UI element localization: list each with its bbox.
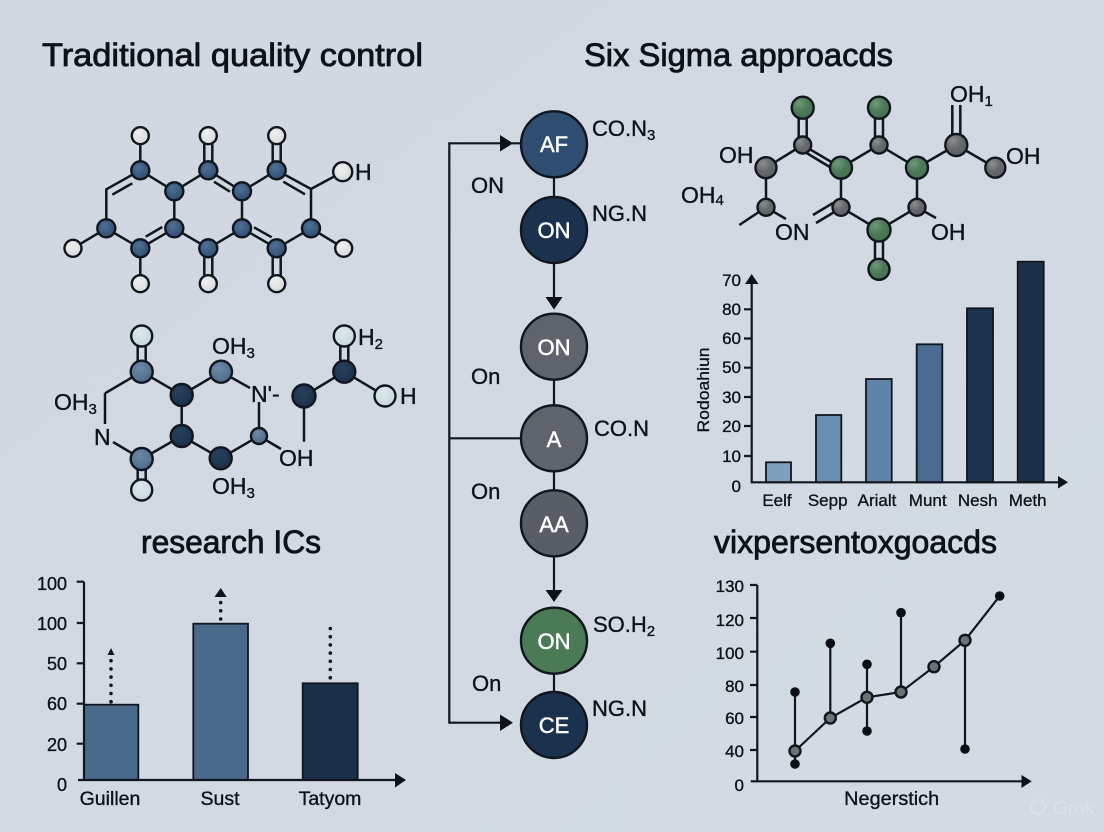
y tick labels: 80 xyxy=(725,677,744,696)
flowchart: central process xyxy=(449,111,655,758)
y tick labels xyxy=(37,574,67,795)
watermark: Grok: Grok xyxy=(1053,798,1095,819)
heading: vixpersentoxgoacds: vixpersentoxgoacds xyxy=(714,524,997,560)
bars xyxy=(766,262,1044,482)
x category labels: Sust xyxy=(200,788,240,810)
chemical labels: H xyxy=(358,324,375,350)
bonds xyxy=(73,136,344,284)
flow labels: 2 xyxy=(647,623,655,640)
node: ON green xyxy=(521,608,587,674)
flow labels: SO.H xyxy=(593,612,647,637)
white atoms xyxy=(64,127,352,292)
chemical labels: ON xyxy=(775,219,810,245)
node: CE: CE xyxy=(539,713,569,738)
pale atoms xyxy=(131,326,395,500)
y tick labels: 120 xyxy=(716,611,744,630)
y tick labels: 0 xyxy=(735,776,744,795)
x category labels: Munt xyxy=(909,491,947,510)
chemical labels: OH xyxy=(719,142,754,168)
arrow: to CE xyxy=(500,714,513,731)
node: ON green: ON xyxy=(538,629,570,654)
y tick labels: 100 xyxy=(37,614,67,634)
trend markers xyxy=(790,635,970,756)
y tick labels: 30 xyxy=(722,388,741,407)
y tick labels: 60 xyxy=(47,694,67,714)
node: ON gray: ON xyxy=(538,335,570,360)
watermark: Grok xyxy=(1031,798,1095,819)
title: six sigma approacds: Six Sigma approacds xyxy=(584,37,893,73)
y tick labels xyxy=(716,577,744,795)
flow labels: CO.N xyxy=(592,116,647,141)
bonds xyxy=(739,105,995,269)
range stems xyxy=(795,613,965,764)
node: ON dark: ON xyxy=(538,218,570,243)
axis arrowheads xyxy=(745,274,1068,488)
node: ON dark xyxy=(521,197,587,263)
dotted error indicators xyxy=(111,601,330,702)
chemical labels: H xyxy=(400,383,417,409)
node: AA xyxy=(521,490,587,556)
label: H: H xyxy=(355,159,372,185)
chemical labels: 3 xyxy=(88,401,97,418)
chemical labels: 4 xyxy=(716,192,724,209)
axes xyxy=(750,585,1022,781)
chemical labels: OH xyxy=(950,81,984,107)
bars xyxy=(84,624,358,780)
chemical labels: OH xyxy=(212,473,246,499)
y tick labels: 60 xyxy=(725,709,744,728)
y tick labels: 70 xyxy=(722,271,741,290)
axes xyxy=(744,280,1058,482)
node: A xyxy=(521,405,587,471)
flow labels: 3 xyxy=(647,127,655,144)
chemical labels: 2 xyxy=(375,336,383,353)
y tick labels: 130 xyxy=(716,577,744,596)
chemical labels: OH xyxy=(212,333,246,359)
arrow: to AF xyxy=(500,135,513,152)
molecule: green and gray rings xyxy=(681,81,1040,280)
y tick labels: 100 xyxy=(37,574,67,594)
node: AF xyxy=(521,111,587,177)
small arrowheads xyxy=(108,588,227,655)
y tick labels: 0 xyxy=(57,775,67,795)
bar chart: rising six bars xyxy=(694,262,1068,510)
feedback loop line xyxy=(449,143,521,723)
flow labels: NG.N xyxy=(592,696,647,721)
node: A: A xyxy=(547,427,562,452)
x category labels: Meth xyxy=(1009,491,1047,510)
x category labels: Arialt xyxy=(858,491,897,510)
x category labels: Guillen xyxy=(80,788,140,810)
arrow: down to third node xyxy=(546,297,562,310)
node: AF: AF xyxy=(540,132,568,157)
chemical labels: N xyxy=(94,424,111,450)
molecule: nitrogen ring structure xyxy=(54,324,417,502)
flow labels: CO.N xyxy=(594,416,649,441)
x category labels xyxy=(80,788,361,810)
blue atoms xyxy=(97,161,320,257)
chemical labels: OH xyxy=(931,219,966,245)
y tick labels xyxy=(722,271,741,496)
connectors xyxy=(553,144,555,725)
mid-blue atoms xyxy=(131,361,267,470)
chemical labels xyxy=(681,81,1040,245)
axis arrowhead xyxy=(1022,775,1032,788)
y tick labels: 80 xyxy=(722,300,741,319)
flow labels: On xyxy=(471,364,500,389)
y tick labels: 100 xyxy=(716,644,744,663)
flow labels: On xyxy=(472,671,501,696)
axis arrowhead xyxy=(395,773,406,788)
gray atoms xyxy=(756,134,1005,216)
x category labels xyxy=(762,491,1047,510)
molecule: blue and white fused rings xyxy=(64,127,372,292)
y tick labels: 60 xyxy=(722,329,741,348)
x category labels: Nesh xyxy=(958,491,998,510)
x axis title: Negerstich xyxy=(844,788,939,810)
flow labels: On xyxy=(471,479,500,504)
chemical labels: OH xyxy=(681,182,716,208)
title: traditional quality control: Traditional quality control xyxy=(42,37,423,73)
range end points xyxy=(790,591,1004,769)
green atoms xyxy=(792,97,928,280)
node: AA: AA xyxy=(539,512,569,537)
y tick labels: 10 xyxy=(722,447,741,466)
chemical labels: OH xyxy=(54,389,88,415)
arrow: down to green node xyxy=(546,590,562,602)
axes xyxy=(77,582,396,780)
dark atoms xyxy=(171,361,355,469)
chemical labels xyxy=(54,324,417,502)
x category labels: Tatyom xyxy=(299,788,361,810)
line chart: vixpersentoxgoacds xyxy=(716,577,1032,810)
y tick labels: 20 xyxy=(47,735,67,755)
x category labels: Sepp xyxy=(808,491,848,510)
flow labels: NG.N xyxy=(592,201,647,226)
chemical labels: 1 xyxy=(984,93,993,110)
y tick labels: 50 xyxy=(722,358,741,377)
x category labels: Eelf xyxy=(762,491,792,510)
y tick labels: 20 xyxy=(722,417,741,436)
bonds xyxy=(105,336,385,490)
node: CE xyxy=(521,692,587,758)
chemical labels: 3 xyxy=(246,345,255,362)
y tick labels: 40 xyxy=(725,742,744,761)
y axis title: Rodoahiun xyxy=(694,348,713,432)
node: ON gray xyxy=(521,314,587,380)
y tick labels: 0 xyxy=(732,477,741,496)
bar chart: research ICs xyxy=(37,574,406,810)
chemical labels: OH xyxy=(279,445,314,471)
chemical labels: OH xyxy=(1006,143,1040,169)
heading: research ICs: research ICs xyxy=(141,524,321,560)
flow labels: ON xyxy=(471,173,504,198)
y tick labels: 50 xyxy=(47,654,67,674)
chemical labels: N'- xyxy=(251,381,280,407)
chemical labels: 3 xyxy=(246,485,255,502)
flow labels xyxy=(471,116,655,721)
trend line xyxy=(795,596,1000,751)
